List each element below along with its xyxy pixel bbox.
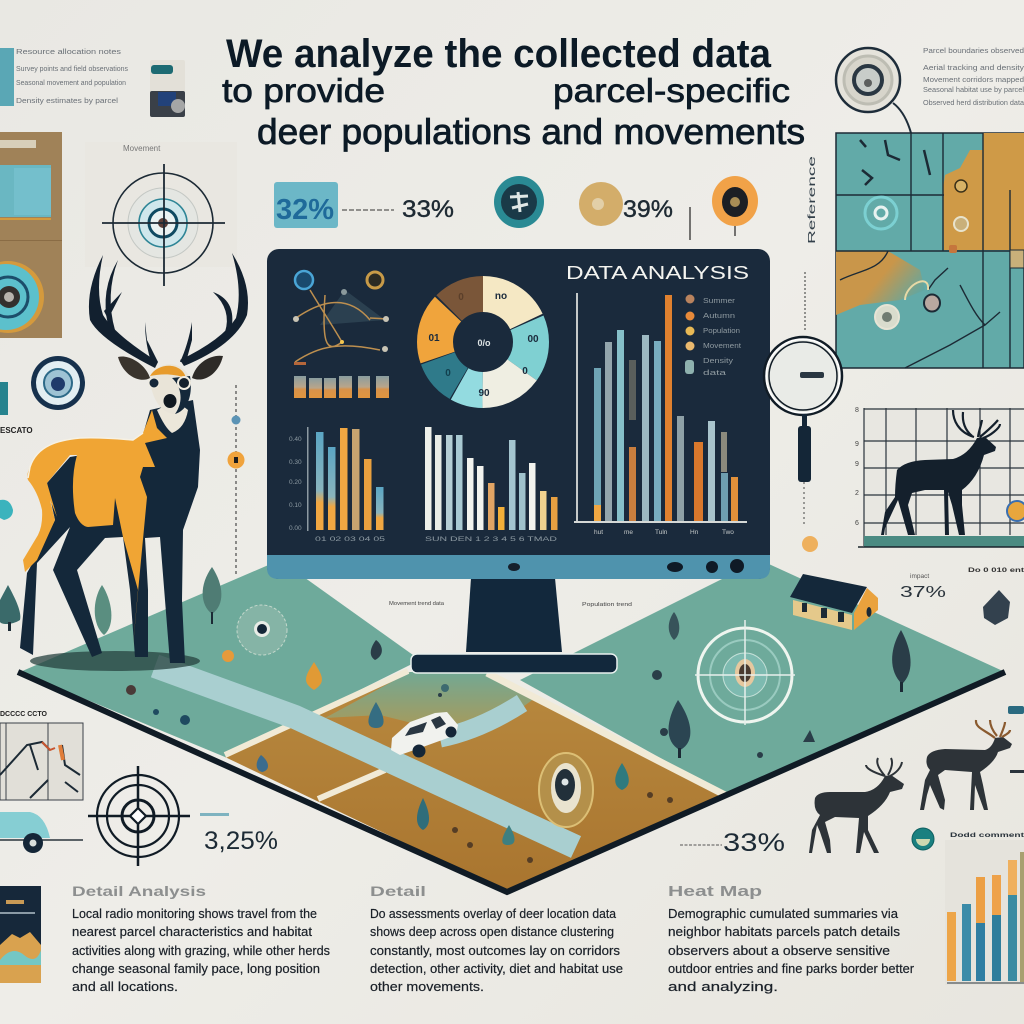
stat: 37%: impact xyxy=(910,573,929,580)
donut labels: 90 xyxy=(478,388,490,399)
deer silhouette upper xyxy=(920,737,1012,810)
stats row: 39% xyxy=(623,196,673,223)
grid chart with deer: 8 xyxy=(855,407,859,414)
text block: heat map: neighbor habitats parcels patch details xyxy=(668,924,901,939)
donut labels xyxy=(428,291,539,399)
panel: top-left legend text: Density estimates by parcel xyxy=(16,98,119,105)
icon: teal badge xyxy=(912,828,934,850)
panel: top-left legend text: Survey points and field observations xyxy=(16,66,128,73)
stat: 37%: 37% xyxy=(900,584,946,601)
grid chart with deer xyxy=(855,407,1024,547)
right bar chart: me xyxy=(624,529,633,536)
land target left xyxy=(237,605,287,655)
left bar chart: 01 02 03 04 05 xyxy=(315,536,386,543)
panel: target with crosshair: Movement xyxy=(123,144,161,153)
text block: detail: other movements. xyxy=(370,979,484,994)
text block: detail: Do assessments overlay of deer location data xyxy=(370,906,617,921)
panel: top-left legend text: Seasonal movement and population xyxy=(16,80,126,87)
grid chart with deer: 9 xyxy=(855,441,859,448)
middle bar chart: SUN DEN 1 2 3 4 5 6 TMAD xyxy=(425,536,557,543)
icon: small field photo xyxy=(150,60,185,117)
landscape: right green field xyxy=(520,560,1005,795)
donut labels: no xyxy=(495,291,507,302)
text block: detail analysis: nearest parcel characteristics and habitat xyxy=(72,924,312,939)
stat: 33% lower right: 33% xyxy=(723,829,785,857)
left bar chart: 0.00 xyxy=(289,525,302,532)
monitor xyxy=(267,249,770,673)
magnifier xyxy=(764,337,842,552)
right bar chart: hut xyxy=(594,529,603,536)
stand fragments: Population trend xyxy=(582,602,632,608)
panel: left brown map cards xyxy=(0,132,62,338)
legend fragments left xyxy=(0,382,33,520)
dotted leader with markers xyxy=(228,385,244,575)
panel: target with crosshair xyxy=(85,142,237,286)
text block: heat map xyxy=(668,883,915,994)
stat: 3,25%: 3,25% xyxy=(204,827,278,855)
chart legend: Density xyxy=(703,358,734,365)
text block: heat map: Heat Map xyxy=(668,883,762,900)
donut chart xyxy=(435,294,531,390)
lower-left target xyxy=(88,766,190,866)
grid chart with deer: 9 xyxy=(855,461,859,468)
left small map and car xyxy=(0,711,83,853)
ground shadow under deer xyxy=(30,651,200,671)
car xyxy=(391,712,458,758)
thumbnail: area chart xyxy=(0,886,41,983)
text block: heat map: outdoor entries and fine parks border better xyxy=(668,961,915,976)
left small map and car: DCCCC CCTO xyxy=(0,711,47,718)
stat: 33% lower right xyxy=(680,829,785,857)
title: We analyze the collected data xyxy=(226,32,772,76)
text block: detail: constantly, most outcomes lay on corridors xyxy=(370,943,621,958)
trees xyxy=(0,567,911,863)
text block: detail: Detail xyxy=(370,883,426,899)
middle bar chart xyxy=(425,427,558,543)
chart legend: Autumn xyxy=(703,313,735,320)
antlers lower deer xyxy=(866,758,902,776)
title xyxy=(222,32,805,152)
chart legend: Population xyxy=(703,328,740,335)
landscape: left green field xyxy=(20,560,420,757)
stand fragments xyxy=(389,601,632,608)
donut labels: 00 xyxy=(527,334,539,345)
grid chart with deer: 6 xyxy=(855,520,859,527)
top-right text block: Seasonal habitat use by parcel xyxy=(923,87,1024,94)
landscape: brown central parcel xyxy=(225,672,727,892)
legend fragments left: ESCATO xyxy=(0,426,33,435)
panel: lower-right bar chart xyxy=(945,840,1024,985)
top-right text block xyxy=(923,48,1024,107)
chart legend: Summer xyxy=(703,298,736,305)
stats row: 33% xyxy=(402,196,454,223)
top-right text block: Parcel boundaries observed xyxy=(923,48,1024,55)
icon: top-right target pin xyxy=(836,48,911,133)
grid chart with deer: 2 xyxy=(855,490,859,497)
left bar chart: 0.10 xyxy=(289,502,302,509)
text block: detail analysis: activities along with grazing, while other herds xyxy=(72,943,330,958)
right bar chart: Two xyxy=(722,529,734,536)
dotted leader to magnifier xyxy=(804,272,806,332)
title: parcel-specific xyxy=(553,72,790,109)
top-right text block: Movement corridors mapped xyxy=(923,77,1024,84)
stat: 3,25% xyxy=(200,813,278,855)
left bar chart: 0.20 xyxy=(289,479,302,486)
text block: detail xyxy=(370,883,623,994)
text block: detail analysis: Detail Analysis xyxy=(72,883,206,899)
donut labels: 0 xyxy=(458,292,464,303)
stat: 37% xyxy=(900,573,946,601)
donut labels: 0 xyxy=(445,368,451,379)
chart legend xyxy=(685,294,741,377)
text block: detail analysis xyxy=(72,883,330,994)
text block: heat map: and analyzing. xyxy=(668,979,778,994)
parcel map xyxy=(836,133,1024,368)
text block: heat map: Demographic cumulated summaries via xyxy=(668,906,899,921)
text block: detail analysis: and all locations. xyxy=(72,979,178,994)
text block: detail: shows deep across open distance clustering xyxy=(370,924,614,939)
top-right text block: Observed herd distribution data xyxy=(923,100,1024,107)
right fragment label and icon xyxy=(968,568,1024,625)
panel: top-left legend text xyxy=(0,48,128,106)
right fragment label and icon: Do 0 010 ent xyxy=(968,568,1024,574)
landscape: top green wedge of central parcel xyxy=(325,672,535,730)
right bar chart xyxy=(574,293,747,536)
landscape: dark outer edge xyxy=(18,672,1005,892)
donut labels: 01 xyxy=(428,333,440,344)
network chart xyxy=(293,271,389,365)
antlers upper deer xyxy=(976,720,1010,738)
donut labels: 0/o xyxy=(477,338,491,348)
text block: detail: detection, other activity, diet and habitat use xyxy=(370,961,623,976)
title: to provide xyxy=(222,72,385,109)
right edge fragments xyxy=(1008,706,1024,773)
text block: detail analysis: Local radio monitoring shows travel from the xyxy=(72,906,317,921)
left bar chart xyxy=(289,427,386,543)
bar chart lower right label: Dodd comment xyxy=(950,832,1024,839)
right bar chart: Hn xyxy=(690,529,699,536)
stats row xyxy=(274,176,758,240)
top-right text block: Aerial tracking and density xyxy=(923,65,1024,72)
icon: target badge left xyxy=(31,356,85,410)
chart legend: data xyxy=(703,370,726,377)
land target right xyxy=(695,620,795,725)
landscape: cream field lines xyxy=(225,655,725,799)
land marker: eye target xyxy=(539,753,593,827)
left bar chart: 0.40 xyxy=(289,436,302,443)
house xyxy=(790,574,878,630)
deer silhouette lower xyxy=(809,775,904,853)
donut labels: 0 xyxy=(522,366,528,377)
panel: top-left legend text: Resource allocation notes xyxy=(16,49,122,56)
monitor heading: DATA ANALYSIS xyxy=(566,263,749,283)
stats row: 32% xyxy=(276,194,334,226)
left bar chart: 0.30 xyxy=(289,459,302,466)
title: deer populations and movements xyxy=(257,111,805,152)
tile bar strip xyxy=(294,376,389,398)
stand fragments: Movement trend data xyxy=(389,601,444,607)
right bar chart: Tuln xyxy=(655,529,668,536)
text block: heat map: observers about a observe sensitive xyxy=(668,943,890,958)
text block: detail analysis: change seasonal family pace, long position xyxy=(72,961,320,976)
deer illustration xyxy=(20,253,248,663)
vertical label: Reference xyxy=(807,155,818,244)
landscape: river xyxy=(155,666,576,847)
chart legend: Movement xyxy=(703,343,741,350)
